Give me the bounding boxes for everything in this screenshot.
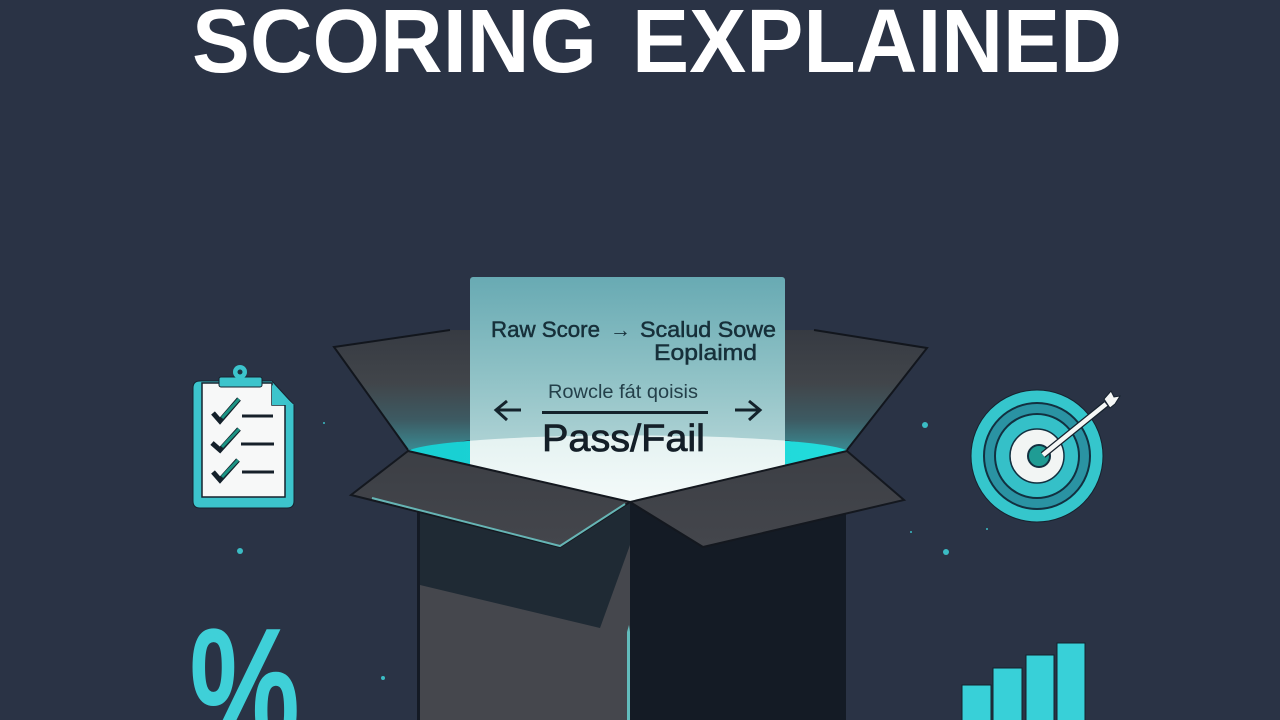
pass fail label: Pass/Fail — [542, 418, 705, 460]
right arrow — [735, 401, 760, 420]
open box illustration — [334, 277, 927, 720]
decorative dots — [237, 422, 988, 680]
arrow between scores: → — [610, 317, 631, 342]
explained label: Eoplaimd — [654, 340, 757, 365]
front right flap — [630, 451, 904, 547]
back right flap — [785, 330, 927, 450]
clipboard clip — [219, 365, 262, 387]
icon: rising bar chart — [962, 643, 1085, 720]
score sheet — [470, 277, 785, 501]
box right face — [630, 500, 846, 720]
arrow — [1043, 391, 1120, 455]
box left face — [417, 500, 630, 720]
scaled score label: Scalud Sowe — [640, 317, 776, 342]
back left flap — [334, 330, 470, 450]
left arrow — [496, 401, 521, 420]
front left flap — [351, 451, 630, 547]
icon: clipboard checklist — [193, 365, 294, 508]
raw score label: Raw Score — [491, 317, 600, 342]
divider line — [542, 411, 708, 414]
checklist rows — [212, 399, 274, 480]
icon: target with arrow — [971, 390, 1120, 522]
title — [192, 0, 1122, 92]
cyan glow inside box — [408, 435, 848, 501]
rounded points label: Rowcle fát qoisis — [548, 382, 698, 403]
